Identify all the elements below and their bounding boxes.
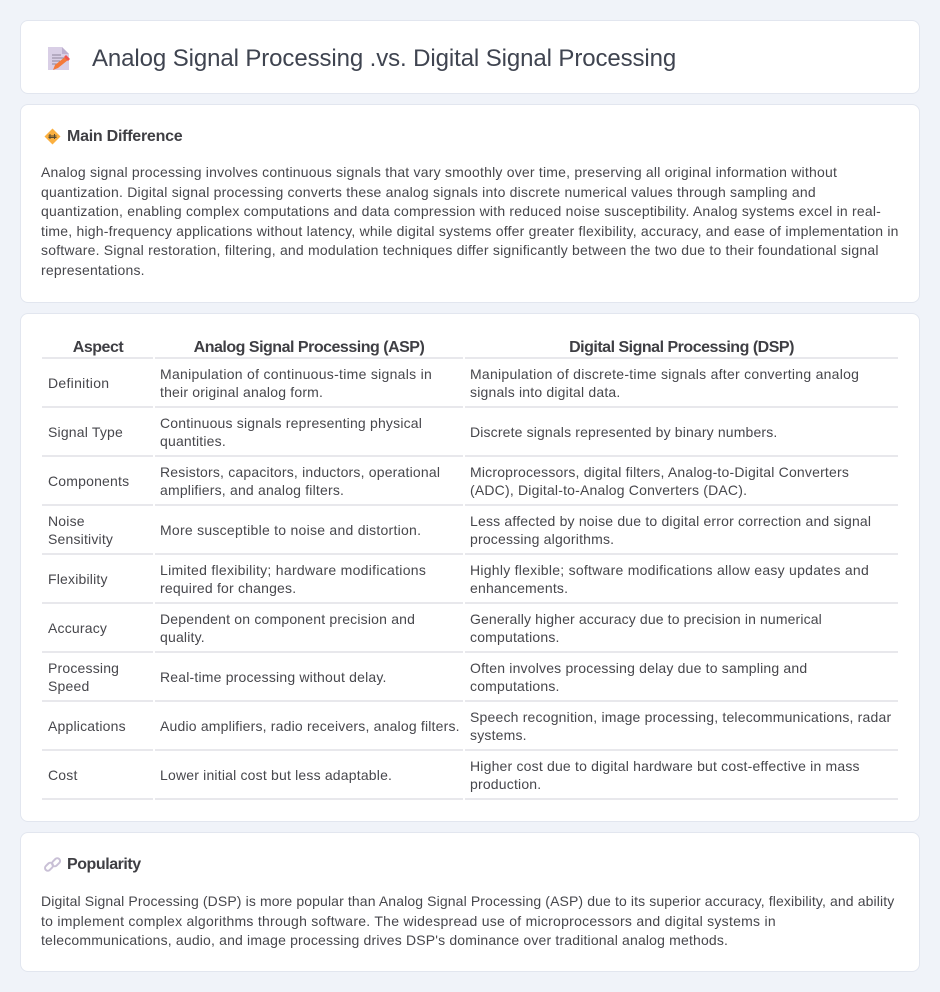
row: signal type: Continuous signals representing physical bbox=[160, 415, 422, 431]
row: definition: Manipulation of discrete-time signals after converting analog bbox=[470, 366, 859, 382]
row: definition: Definition bbox=[48, 375, 109, 391]
row: processing speed: Often involves processing delay due to sampling and bbox=[470, 660, 807, 676]
row: applications: Audio amplifiers, radio receivers, analog filters. bbox=[160, 718, 460, 734]
text: main difference paragraph bbox=[41, 164, 899, 278]
panel: main difference bbox=[20, 104, 920, 303]
row: processing speed bbox=[48, 660, 807, 694]
row: cost: Higher cost due to digital hardware but cost-effective in mass bbox=[470, 758, 860, 774]
row: applications: Applications bbox=[48, 718, 126, 734]
heading: popularity: Popularity bbox=[67, 856, 141, 873]
row: applications bbox=[48, 709, 891, 743]
row: accuracy: Accuracy bbox=[48, 620, 107, 636]
row: components: (ADC), Digital-to-Analog Converters (DAC). bbox=[470, 482, 747, 498]
panel: comparison table bbox=[20, 313, 920, 822]
row: accuracy: Dependent on component precision and bbox=[160, 611, 415, 627]
row: cost: production. bbox=[470, 776, 541, 792]
row: definition: Manipulation of continuous-time signals in bbox=[160, 366, 432, 382]
text: main difference paragraph: quantization. Digital signal processing converts these analog signals into discrete numerical values through sampling and bbox=[41, 184, 816, 200]
row: processing speed: Speed bbox=[48, 678, 89, 694]
row: processing speed: Real-time processing without delay. bbox=[160, 669, 387, 685]
text: popularity paragraph bbox=[41, 893, 894, 948]
row: cost: Lower initial cost but less adaptable. bbox=[160, 767, 392, 783]
table header: Aspect bbox=[73, 339, 123, 356]
row: flexibility: Highly flexible; software modifications allow easy updates and bbox=[470, 562, 869, 578]
row: signal type bbox=[48, 415, 777, 449]
row: processing speed: Processing bbox=[48, 660, 119, 676]
text: main difference paragraph: software. Signal restoration, filtering, and modulation techniques differ significantly between the two due to their foundational signal bbox=[41, 242, 879, 258]
icon: warning diamond bbox=[44, 128, 60, 144]
row: signal type: Discrete signals represented by binary numbers. bbox=[470, 424, 777, 440]
row: accuracy: Generally higher accuracy due to precision in numerical bbox=[470, 611, 822, 627]
icon: document with pencil bbox=[48, 47, 70, 70]
heading: main difference: Main Difference bbox=[67, 128, 182, 145]
title: Analog Signal Processing .vs. Digital Signal Processing bbox=[92, 45, 676, 72]
row: noise sensitivity: More susceptible to noise and distortion. bbox=[160, 522, 421, 538]
row: applications: Speech recognition, image processing, telecommunications, radar bbox=[470, 709, 891, 725]
row: noise sensitivity: processing algorithms. bbox=[470, 531, 614, 547]
row: flexibility: enhancements. bbox=[470, 580, 568, 596]
row: definition bbox=[48, 366, 859, 400]
table header bbox=[73, 339, 794, 356]
row: flexibility: Flexibility bbox=[48, 571, 108, 587]
row: noise sensitivity: Sensitivity bbox=[48, 531, 113, 547]
text: popularity paragraph: Digital Signal Processing (DSP) is more popular than Analog Signal Processing (ASP) due to its superior accuracy, flexibility, and ability bbox=[41, 893, 894, 909]
row: flexibility: required for changes. bbox=[160, 580, 296, 596]
row: accuracy bbox=[48, 611, 822, 645]
row: components: Resistors, capacitors, inductors, operational bbox=[160, 464, 440, 480]
panel: title bbox=[20, 20, 920, 94]
panel: popularity bbox=[20, 832, 920, 972]
icon: chain link bbox=[44, 857, 61, 872]
table header: Analog Signal Processing (ASP) bbox=[194, 339, 424, 356]
row: signal type: Signal Type bbox=[48, 424, 123, 440]
row: definition: signals into digital data. bbox=[470, 384, 620, 400]
text: main difference paragraph: time, high-frequency applications without latency, while digital systems offer greater flexibility, accuracy, and ease of implementation in bbox=[41, 223, 899, 239]
row: flexibility: Limited flexibility; hardware modifications bbox=[160, 562, 426, 578]
text: main difference paragraph: representations. bbox=[41, 262, 145, 278]
row: definition: their original analog form. bbox=[160, 384, 323, 400]
comparison table bbox=[42, 339, 898, 800]
row: cost: Cost bbox=[48, 767, 78, 783]
row: applications: systems. bbox=[470, 727, 527, 743]
text: main difference paragraph: Analog signal processing involves continuous signals that vary smoothly over time, preserving all original information without bbox=[41, 164, 837, 180]
row: accuracy: computations. bbox=[470, 629, 560, 645]
row: signal type: quantities. bbox=[160, 433, 226, 449]
row: flexibility bbox=[48, 562, 869, 596]
row: cost bbox=[48, 758, 860, 792]
text: main difference paragraph: quantization, enabling complex computations and data compression with reduced noise susceptibility. Analog systems excel in real- bbox=[41, 203, 881, 219]
table header: Digital Signal Processing (DSP) bbox=[569, 339, 794, 356]
row: noise sensitivity bbox=[48, 513, 871, 547]
text: popularity paragraph: telecommunications, audio, and image processing drives DSP's dominance over traditional analog methods. bbox=[41, 932, 728, 948]
row: processing speed: computations. bbox=[470, 678, 560, 694]
row: components: Microprocessors, digital filters, Analog-to-Digital Converters bbox=[470, 464, 849, 480]
text: popularity paragraph: to implement complex algorithms through software. The widespread use of microprocessors and digital systems in bbox=[41, 913, 776, 929]
row: noise sensitivity: Less affected by noise due to digital error correction and signal bbox=[470, 513, 871, 529]
row: noise sensitivity: Noise bbox=[48, 513, 85, 529]
row: components: Components bbox=[48, 473, 129, 489]
row: components bbox=[48, 464, 849, 498]
row: components: amplifiers, and analog filters. bbox=[160, 482, 344, 498]
row: accuracy: quality. bbox=[160, 629, 205, 645]
